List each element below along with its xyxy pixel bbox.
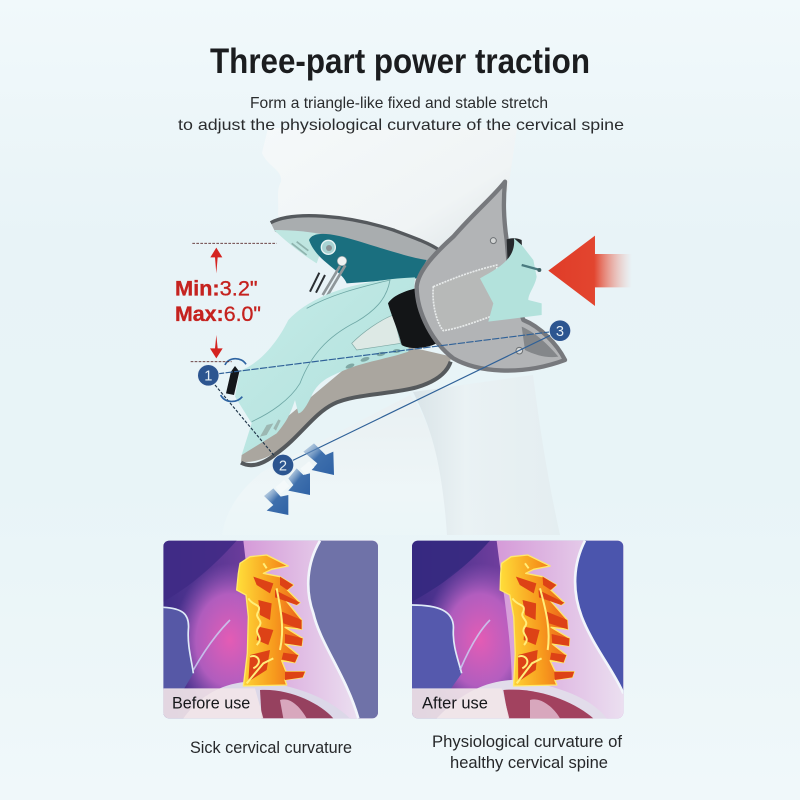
red push arrow: [548, 236, 632, 306]
panel: before use: [163, 541, 378, 718]
subtitle text: [178, 95, 624, 134]
force triangle lines: [208, 331, 560, 465]
panel: after use: [412, 541, 623, 718]
label strip: [412, 688, 509, 718]
height dimension: Min:3.2": [175, 277, 258, 301]
black strap: [388, 287, 437, 348]
lower mint plate: [235, 277, 415, 455]
subtitle text: to adjust the physiological curvature of the cervical spine: [178, 117, 624, 134]
plate slots: [345, 349, 401, 370]
cervical collar: [175, 182, 632, 515]
title: Three-part power traction: [210, 42, 590, 81]
number badges: 2: [279, 458, 287, 474]
height dimension: Max:6.0": [175, 302, 261, 326]
shoulder and neck silhouette: [222, 375, 560, 535]
number badges: 1: [204, 369, 212, 385]
neck glow: [432, 568, 512, 688]
mint back bracket: [480, 238, 542, 322]
spine vertebrae: [237, 555, 305, 686]
head silhouette: [262, 128, 517, 285]
black chin pad: [226, 366, 239, 395]
blue force arrows: [264, 443, 334, 515]
teal chin support: [309, 234, 427, 283]
upper mint jaw plate: [274, 230, 327, 263]
caption: after use: [432, 733, 622, 772]
neck glow: [181, 568, 248, 688]
caption: before use: Sick cervical curvature: [190, 739, 352, 757]
collar upper cushion: [271, 216, 443, 270]
subtitle text: Form a triangle-like fixed and stable stretch: [250, 95, 548, 112]
adjustment screws: [310, 240, 347, 297]
panel: after use: After use: [422, 695, 488, 713]
hook and loop strap: [433, 265, 500, 331]
label strip: [163, 688, 263, 718]
spine vertebrae: [498, 555, 575, 686]
height dimension: [175, 243, 277, 362]
back neck pad: [417, 182, 565, 371]
number badges: 3: [556, 324, 564, 340]
rivets: [490, 238, 496, 244]
caption: after use: healthy cervical spine: [450, 754, 608, 772]
lower grey cushion: [241, 347, 452, 462]
number badges: [198, 320, 571, 476]
caption: after use: Physiological curvature of: [432, 733, 622, 751]
rotation arrows: [221, 359, 246, 401]
panel: before use: Before use: [172, 695, 250, 713]
